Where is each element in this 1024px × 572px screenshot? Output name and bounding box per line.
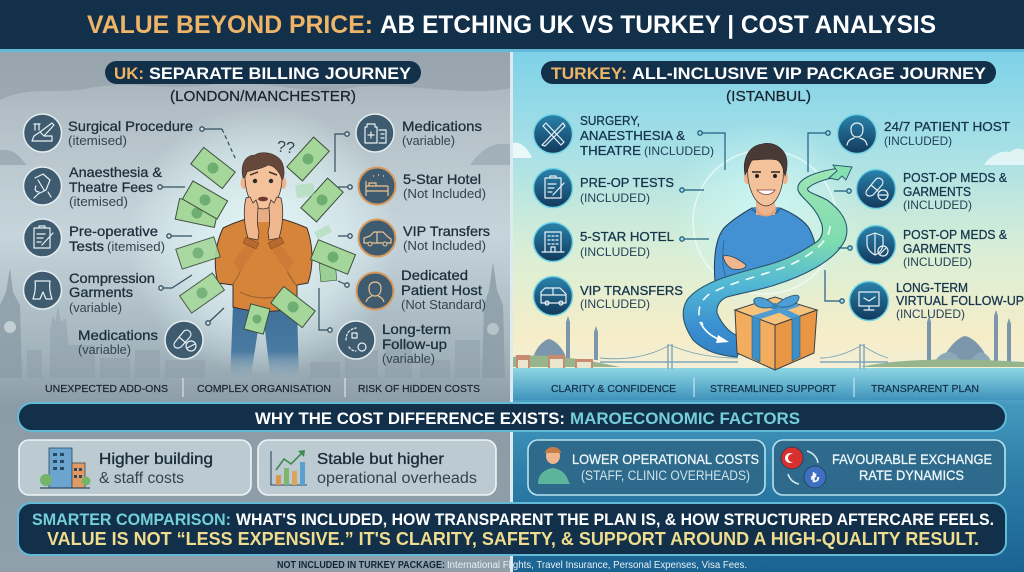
text: medications right: (variable) [402, 134, 455, 148]
card: higher building costs [19, 440, 251, 495]
text: 5-star hotel Turkey: 5-STAR HOTEL [580, 229, 674, 244]
banner: smarter comparison [18, 503, 1006, 555]
card: higher building costs: Higher building [99, 451, 213, 468]
text: pre-operative tests: Tests [69, 238, 104, 254]
text: post-op meds 2: GARMENTS [903, 241, 971, 256]
text: 5-star hotel: 5-Star Hotel [403, 171, 481, 187]
icon: medications bottle [356, 114, 394, 152]
icon: currency exchange [781, 447, 826, 488]
text: 5-star hotel Turkey: (INCLUDED) [580, 245, 650, 259]
icon: patient host Turkey [838, 114, 876, 154]
card: operational overheads [258, 440, 496, 495]
labels: UK summary strip: RISK OF HIDDEN COSTS [358, 383, 480, 395]
text: compression garments [69, 270, 155, 315]
text: medications left [78, 327, 158, 357]
icon: monitor [850, 282, 888, 320]
subheading: London/Manchester: (LONDON/MANCHESTER) [170, 88, 356, 105]
text: anaesthesia: Anaesthesia & [69, 164, 163, 180]
icon: meds [856, 170, 896, 208]
text: long-term follow-up: (variable) [382, 352, 435, 366]
icon: clipboard [24, 219, 62, 257]
heading: UK pill: UK: [114, 64, 144, 83]
text: anaesthesia: Theatre Fees [69, 179, 153, 195]
icon: van [534, 276, 572, 316]
icon: bar chart [271, 450, 307, 485]
text: surgery anaesthesia theatre: SURGERY, [580, 113, 640, 128]
icon: compression garment [24, 271, 62, 309]
icon: hotel building [534, 222, 572, 262]
icon: car [358, 220, 396, 256]
panel divider [510, 52, 513, 572]
illustration: Istanbul skyline [513, 310, 1024, 369]
card: lower operational costs: LOWER OPERATIONAL COSTS [572, 451, 759, 467]
icon: surgery tools [534, 114, 572, 154]
icon: anaesthesia [24, 167, 62, 205]
text: patient host: (Not Standard) [401, 298, 486, 312]
card: operational overheads: operational overheads [317, 470, 477, 487]
text: post-op meds 2: (INCLUDED) [903, 255, 972, 269]
text: virtual follow-up: (INCLUDED) [896, 307, 965, 321]
card: operational overheads: Stable but higher [317, 451, 445, 468]
text: long-term follow-up: Long-term [382, 321, 451, 337]
text: VIP transfers Turkey: VIP TRANSFERS [580, 283, 683, 298]
text: surgery anaesthesia theatre: ANAESTHESIA & [580, 128, 685, 143]
heading: UK pill: SEPARATE BILLING JOURNEY [149, 64, 412, 83]
subheading: Istanbul: (ISTANBUL) [726, 88, 811, 105]
text: post-op meds 2 [903, 227, 1007, 269]
text: 5-star hotel Turkey [580, 229, 674, 259]
text: anaesthesia [69, 164, 163, 209]
text: patient host Turkey: (INCLUDED) [884, 134, 952, 148]
heading: UK pill [105, 61, 421, 84]
card: lower operational costs [528, 440, 765, 495]
text: surgery anaesthesia theatre: (INCLUDED) [644, 144, 714, 158]
header bar [0, 0, 1024, 52]
text: virtual follow-up: LONG-TERM [896, 280, 968, 295]
icon: pills [165, 321, 203, 359]
icons: falling banknotes [175, 137, 355, 334]
text: surgical procedure: Surgical Procedure [68, 118, 193, 134]
text: pre-operative tests: (itemised) [107, 240, 165, 254]
labels: Turkey summary strip [551, 378, 979, 397]
text: 5-star hotel [403, 171, 486, 201]
heading: Turkey pill: ALL-INCLUSIVE VIP PACKAGE JOURNEY [632, 64, 987, 83]
text: VIP transfers [403, 223, 490, 253]
card: favourable exchange rate: RATE DYNAMICS [859, 467, 964, 483]
banner: why the cost difference exists: MAROECONOMIC FACTORS [570, 409, 800, 428]
icon: currency exchange: ₺ [810, 470, 820, 485]
text: compression garments: Compression [69, 270, 155, 286]
icon: patient host [356, 272, 394, 310]
card: lower operational costs: (STAFF, CLINIC OVERHEADS) [581, 468, 750, 483]
connectors: Turkey [680, 131, 852, 303]
icon: surgical procedure [24, 114, 62, 152]
illustration: winding road [683, 165, 852, 357]
illustration: worried man with money [215, 139, 312, 382]
text: surgery anaesthesia theatre: THEATRE [580, 143, 641, 158]
text: question marks: ?? [276, 139, 296, 157]
text: patient host [401, 267, 486, 312]
icon: clipboard Turkey [534, 168, 572, 208]
text: surgery anaesthesia theatre [580, 113, 714, 158]
banner: why the cost difference exists: WHY THE COST DIFFERENCE EXISTS: [255, 409, 565, 428]
card: favourable exchange rate [773, 440, 1005, 495]
labels: Turkey summary strip: TRANSPARENT PLAN [871, 383, 979, 395]
labels: Turkey summary strip: STREAMLINED SUPPORT [710, 383, 837, 395]
banner: smarter comparison: SMARTER COMPARISON: [32, 510, 231, 529]
icon: hotel bed [358, 168, 396, 204]
text: VIP transfers: (Not Included) [403, 239, 486, 253]
illustration: happy man [714, 143, 816, 285]
labels: UK summary strip [45, 378, 480, 397]
footnote: International Flights, Travel Insurance, Personal Expenses, Visa Fees. [447, 560, 747, 571]
text: patient host: Patient Host [401, 282, 482, 298]
text: medications left: Medications [78, 327, 158, 343]
text: patient host Turkey: 24/7 PATIENT HOST [884, 119, 1010, 134]
heading: Turkey pill: TURKEY: [551, 64, 627, 83]
text: virtual follow-up [896, 280, 1024, 321]
text: patient host Turkey [884, 119, 1010, 148]
title [87, 11, 936, 39]
text: anaesthesia: (itemised) [69, 195, 128, 209]
labels: UK summary strip: UNEXPECTED ADD-ONS [45, 383, 168, 395]
labels: UK summary strip: COMPLEX ORGANISATION [197, 383, 331, 395]
text: medications left: (variable) [78, 343, 131, 357]
icon: clinic staff [538, 447, 570, 484]
icon: follow-up [337, 321, 375, 359]
panel: Turkey background [513, 50, 1024, 572]
text: VIP transfers Turkey [580, 283, 683, 311]
icon: gift box [735, 295, 817, 370]
text: pre-op tests [580, 175, 674, 205]
text: medications right [402, 118, 482, 148]
text: long-term follow-up [382, 321, 451, 366]
icon: buildings [40, 448, 90, 488]
text: surgical procedure [68, 118, 193, 148]
card: higher building costs: & staff costs [99, 470, 184, 487]
text: pre-op tests: (INCLUDED) [580, 191, 650, 205]
text: post-op meds 1: (INCLUDED) [903, 198, 972, 212]
text: VIP transfers: VIP Transfers [403, 223, 490, 239]
text: compression garments: Garments [69, 284, 133, 300]
title: VALUE BEYOND PRICE: [87, 11, 373, 39]
text: post-op meds 1: POST-OP MEDS & [903, 170, 1007, 185]
text: compression garments: (variable) [69, 301, 122, 315]
footnote [277, 560, 747, 571]
icon: shield [856, 226, 896, 264]
text: patient host: Dedicated [401, 267, 468, 283]
text: pre-operative tests: Pre-operative [69, 223, 158, 239]
text: long-term follow-up: Follow-up [382, 336, 447, 352]
text: medications right: Medications [402, 118, 482, 134]
labels: Turkey summary strip: CLARITY & CONFIDENCE [551, 383, 676, 395]
card: favourable exchange rate: FAVOURABLE EXCHANGE [832, 451, 992, 467]
connectors: UK [158, 127, 352, 332]
text: post-op meds 1: GARMENTS [903, 184, 971, 199]
text: pre-op tests: PRE-OP TESTS [580, 175, 674, 190]
heading: Turkey pill [541, 61, 996, 84]
text: post-op meds 2: POST-OP MEDS & [903, 227, 1007, 242]
text: surgical procedure: (itemised) [68, 134, 127, 148]
title: AB ETCHING UK VS TURKEY | COST ANALYSIS [380, 11, 936, 39]
panel: UK background [0, 50, 511, 572]
banner: why the cost difference exists [18, 403, 1006, 431]
banner: smarter comparison: VALUE IS NOT “LESS EXPENSIVE.” IT'S CLARITY, SAFETY, & SUPPORT AROUND A HIGH-QUALITY RESULT. [47, 529, 979, 549]
text: post-op meds 1 [903, 170, 1007, 212]
text: 5-star hotel: (Not Included) [403, 187, 486, 201]
footnote: NOT INCLUDED IN TURKEY PACKAGE: [277, 560, 445, 571]
text: VIP transfers Turkey: (INCLUDED) [580, 297, 650, 311]
illustration: London skyline [0, 262, 505, 378]
text: pre-operative tests [69, 223, 165, 254]
